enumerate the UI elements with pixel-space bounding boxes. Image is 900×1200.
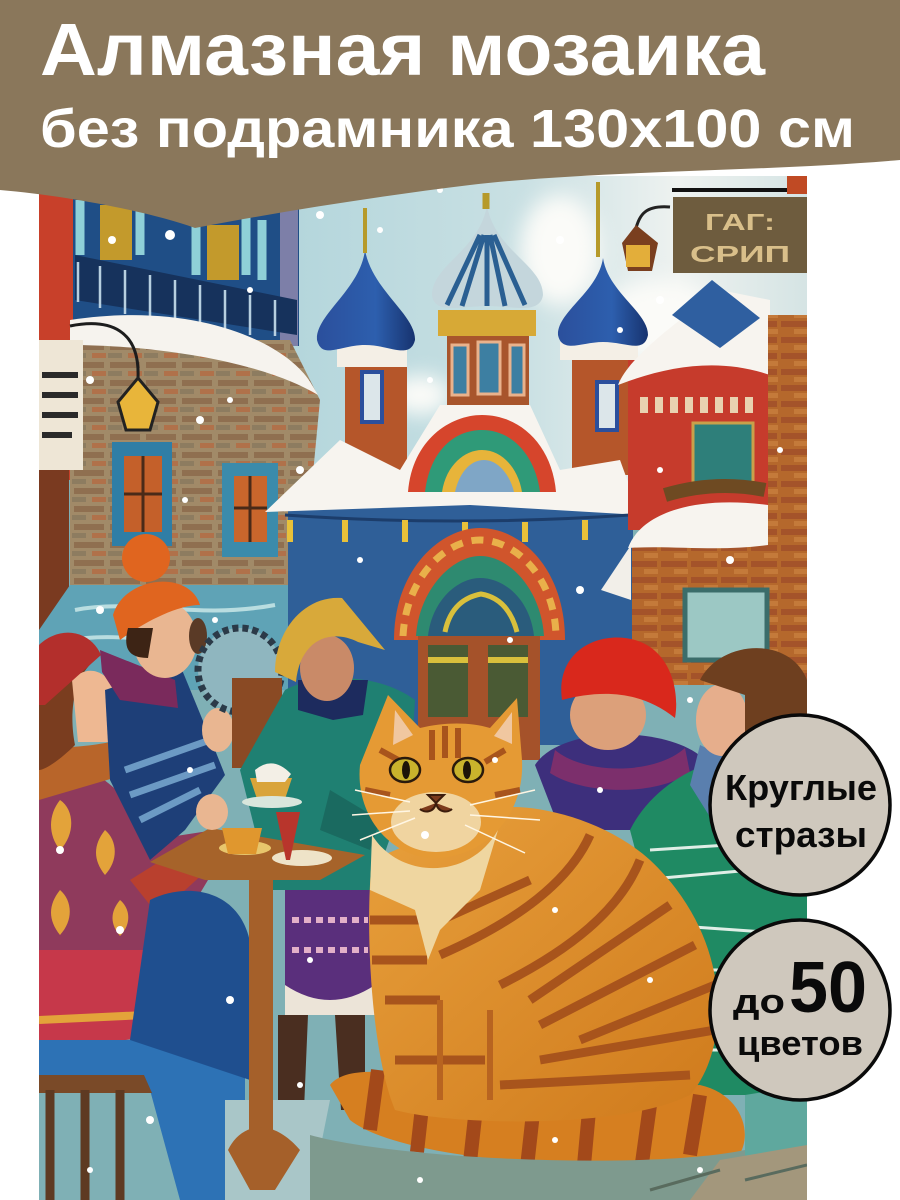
title: Алмазная мозаика <box>40 8 766 91</box>
person: woman in yellow hat and green coat <box>232 598 415 1110</box>
ground <box>225 1100 330 1200</box>
hanging cafe sign: ГАГ: <box>705 209 775 235</box>
badge: up to 50 colours: цветов <box>737 1025 863 1063</box>
left sign fragment <box>39 340 83 470</box>
title <box>40 8 855 159</box>
badge: up to 50 colours <box>710 920 890 1100</box>
badge: round rhinestones: Круглые <box>725 767 877 808</box>
lights <box>285 515 630 521</box>
cat body <box>369 807 718 1121</box>
header banner <box>0 0 900 228</box>
painting: winter cafe with ginger cat <box>39 176 807 1200</box>
water wall <box>39 585 300 690</box>
icon: street lantern left <box>70 324 158 430</box>
wheel ornament <box>198 628 282 712</box>
title: без подрамника 130х100 см <box>40 99 855 159</box>
rainbow arch <box>408 415 556 492</box>
person: woman with brown hair <box>630 648 807 1095</box>
sky <box>293 176 807 482</box>
cat head <box>360 695 522 858</box>
badge: round rhinestones <box>710 715 890 895</box>
hanging cafe sign <box>672 176 807 273</box>
badge: round rhinestones: стразы <box>735 814 867 855</box>
badge: up to 50 colours: до <box>733 983 785 1021</box>
onion domes and towers <box>317 182 648 475</box>
right red building <box>601 280 807 685</box>
cat chest <box>370 830 498 960</box>
snowy roof <box>265 405 640 515</box>
blue building <box>288 505 633 745</box>
arched door <box>394 528 565 760</box>
icon: hanging lantern right <box>622 207 670 271</box>
person: girl with red knitted hat <box>39 633 252 1200</box>
person: woman with orange hat <box>100 534 234 860</box>
left upper building <box>39 176 299 480</box>
snowflakes <box>56 187 783 1183</box>
cat tail <box>330 1072 745 1166</box>
clouds <box>390 195 720 415</box>
stone pedestal and ground <box>310 1135 745 1200</box>
round tower <box>70 315 320 610</box>
hanging cafe sign: СРИП <box>690 241 790 267</box>
badge: up to 50 colours: 50 <box>789 948 867 1028</box>
ginger cat <box>330 695 745 1167</box>
person: boy in red hat <box>535 638 705 830</box>
table with cups <box>150 763 365 1190</box>
